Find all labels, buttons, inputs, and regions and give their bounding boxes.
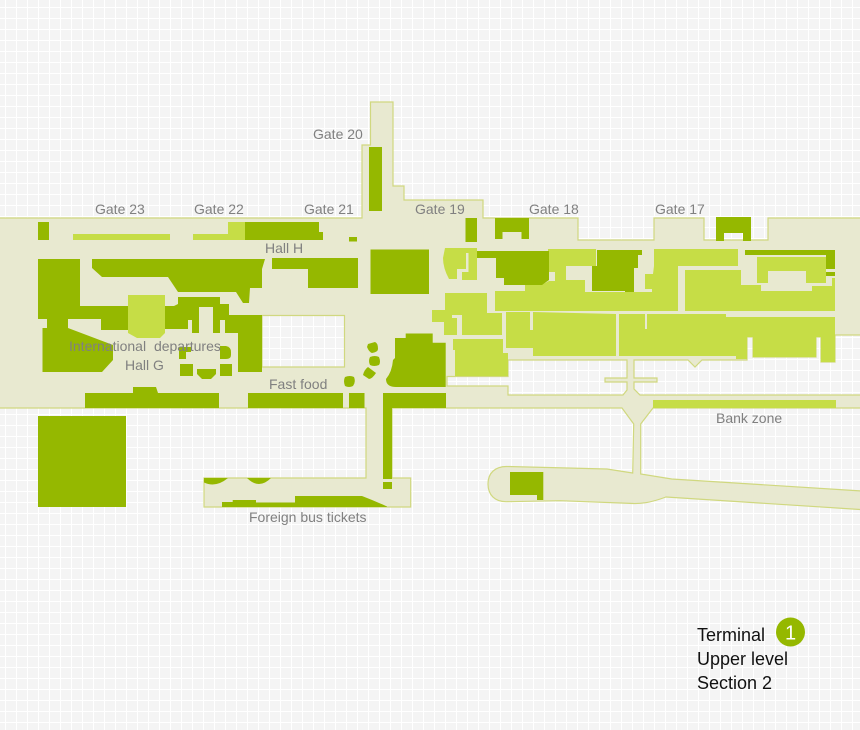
dark: bottom bar fast food	[248, 393, 343, 408]
dark: hall H block	[272, 258, 358, 288]
dark areas: east	[510, 217, 835, 500]
terminal building floor plan	[0, 102, 860, 510]
dark: corridor end square	[383, 482, 392, 489]
label: Bank zone: Bank zone	[716, 410, 782, 426]
label: Gate 22: Gate 22	[194, 201, 244, 217]
dark: long block under gates	[92, 259, 265, 303]
label: Gate 17: Gate 17	[655, 201, 705, 217]
building outline	[0, 102, 860, 510]
dark: corridor wall	[383, 408, 392, 479]
shop block: hook by gate 19	[443, 248, 477, 280]
dark: hall G west block	[38, 259, 128, 372]
dark: gate 17 block	[716, 217, 751, 241]
label: International departures: International departures	[69, 338, 221, 354]
dark: hall G east block	[165, 297, 262, 372]
dark areas: centre	[272, 147, 642, 489]
dark: east L block	[745, 250, 835, 269]
shop block: lower west	[453, 339, 508, 376]
label: Gate 19: Gate 19	[415, 201, 465, 217]
shop block: lower east	[619, 314, 835, 362]
shop block: gate 22 bar	[193, 222, 245, 240]
label: Gate 23: Gate 23	[95, 201, 145, 217]
label: Foreign bus tickets: Foreign bus tickets	[249, 509, 366, 525]
legend text: Section 2: Section 2	[697, 673, 772, 693]
legend text: Terminal: Terminal	[697, 625, 765, 645]
shop block: gate 23 bar	[73, 234, 170, 240]
dark: east small bar	[826, 272, 835, 276]
label: Gate 21: Gate 21	[304, 201, 354, 217]
dark: block by gate 18	[592, 250, 642, 292]
dark: large square bottom left	[38, 416, 126, 507]
dark: planters	[344, 342, 380, 387]
shop block: upper east	[685, 270, 835, 311]
label: Gate 18: Gate 18	[529, 201, 579, 217]
map labels	[69, 126, 782, 525]
light shops: east concourse	[73, 222, 836, 408]
dark: bottom bar east	[383, 393, 446, 408]
shop block: west of passage	[432, 293, 502, 335]
dark: curved block at centre	[386, 334, 446, 387]
shop block: east room	[757, 257, 826, 283]
label: Hall G: Hall G	[125, 357, 164, 373]
dark: bottom bar small	[349, 393, 364, 408]
label: Hall H: Hall H	[265, 240, 303, 256]
dark: gate 20 pier	[369, 147, 382, 211]
dark: block beside hook	[477, 251, 549, 285]
dark: gate 18 block	[495, 218, 529, 239]
legend: terminal info	[697, 618, 805, 693]
dark: bus ticket area	[204, 478, 387, 507]
dark: gate 19 block	[466, 218, 477, 242]
dark: central square	[370, 250, 429, 294]
label: Gate 20: Gate 20	[313, 126, 363, 142]
dark: kiosks	[179, 346, 232, 379]
shop block: central upper	[495, 249, 738, 311]
shop block: bank zone	[653, 400, 836, 408]
label: Fast food: Fast food	[269, 376, 327, 392]
shop block: lower centre	[506, 312, 616, 356]
dark: small kiosk hall H	[349, 237, 357, 242]
dark: gate 23 small block	[38, 222, 49, 240]
dark: bottom bar hall G	[85, 387, 219, 408]
icon: terminal number badge: 1	[785, 622, 796, 644]
dark areas: west wing	[38, 222, 364, 408]
dark: gate 22 block	[245, 222, 323, 240]
dark: wing room	[510, 472, 543, 500]
legend text: Upper level: Upper level	[697, 649, 788, 669]
light: international departures hall	[128, 295, 165, 338]
